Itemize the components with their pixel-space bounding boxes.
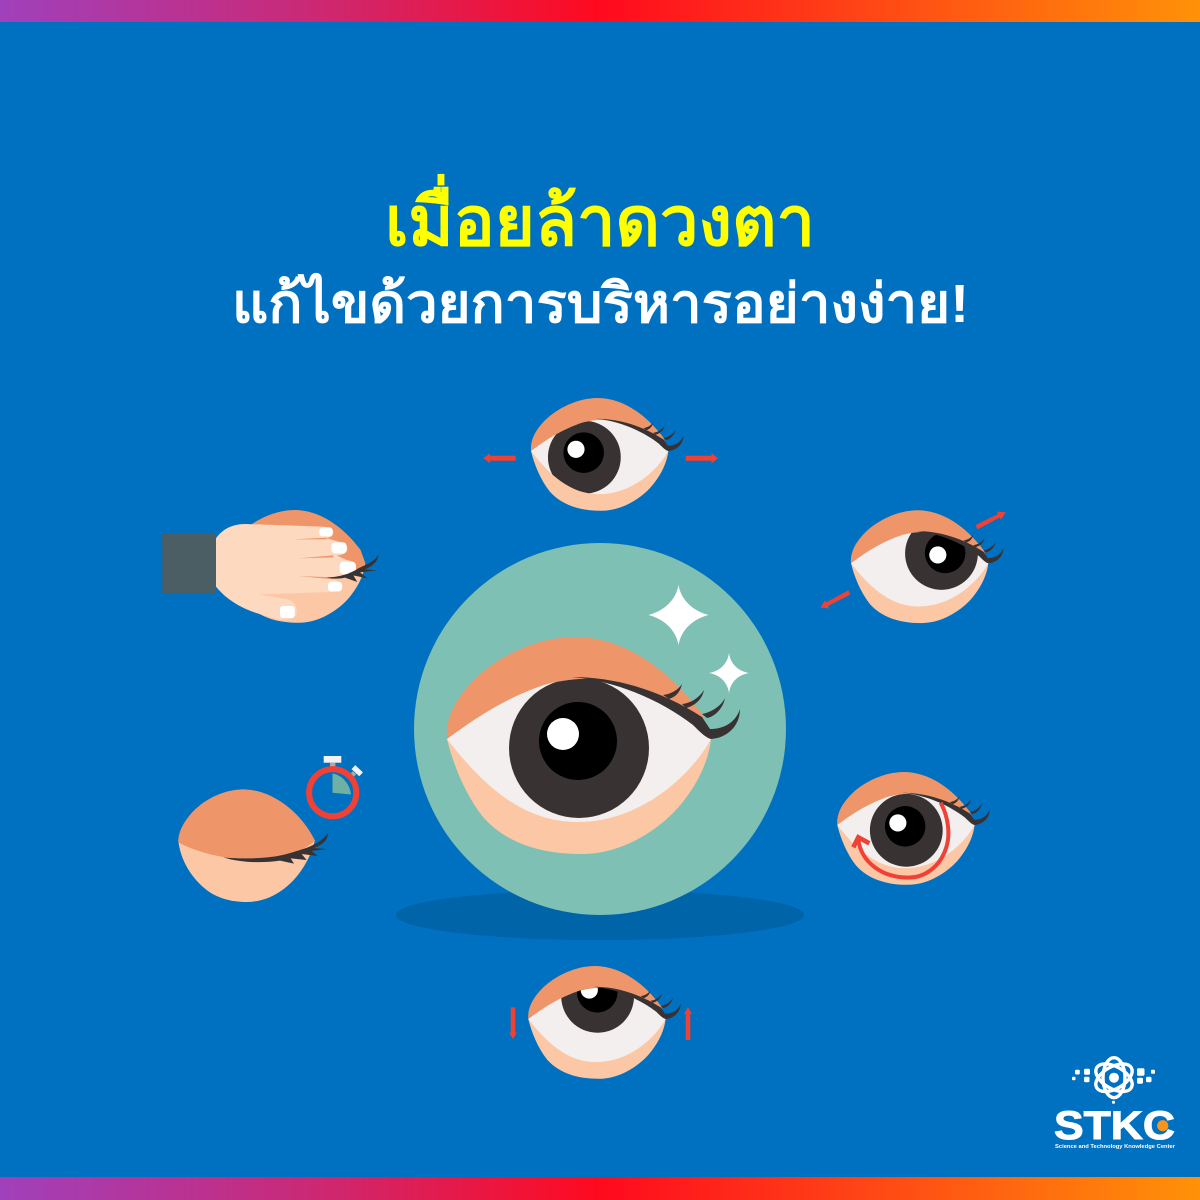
hand and sleeve — [162, 524, 379, 620]
eye shape — [837, 772, 975, 885]
eye: looking up right — [851, 510, 1003, 623]
finger gap 2 — [298, 555, 333, 558]
finger gap 3 — [298, 576, 333, 579]
eye shape — [851, 510, 988, 623]
eye shape — [528, 966, 666, 1079]
logo atom emblem — [1072, 1058, 1155, 1104]
lashes — [223, 833, 328, 864]
sparkle small — [709, 653, 749, 693]
covered eye lid fill — [228, 563, 365, 577]
eye: closed with timer — [178, 756, 363, 902]
eye shape — [531, 398, 668, 511]
logo — [1054, 1058, 1176, 1150]
iris and pupil — [561, 988, 634, 1033]
eyelashes — [596, 419, 683, 451]
arrow: down left — [820, 590, 850, 608]
stopwatch — [309, 756, 363, 816]
central teal circle — [414, 543, 786, 915]
eyelashes — [593, 987, 681, 1019]
iris and pupil — [548, 421, 621, 494]
eye: looking left — [531, 398, 683, 511]
eye body — [837, 772, 990, 885]
iris and pupil — [509, 678, 649, 818]
nail 1 — [319, 527, 333, 536]
iris and pupil — [905, 532, 978, 590]
elapsed time sector — [332, 774, 351, 794]
finger gap 1 — [293, 538, 327, 539]
upper eyelid — [228, 510, 365, 563]
heading line 1: เมื่อยล้าดวงตา — [385, 173, 815, 260]
title — [232, 173, 969, 334]
crown stem — [330, 763, 335, 767]
arrow: up — [684, 1007, 692, 1040]
eyelashes — [572, 677, 740, 739]
lashes over fingers — [327, 554, 379, 582]
eyelashes — [902, 793, 990, 825]
nail 3 — [340, 562, 356, 574]
arrow: up right — [976, 512, 1006, 529]
nail 5 — [280, 606, 295, 618]
iris and pupil — [870, 794, 943, 867]
orbit rings — [1091, 1058, 1137, 1098]
logo wordmark: STKC — [1054, 1104, 1175, 1148]
circular arrow — [853, 803, 948, 878]
heading line 2: แก้ไขด้วยการบริหารอย่างง่าย! — [232, 272, 969, 334]
eyelashes — [916, 531, 1003, 563]
nucleus — [1109, 1073, 1119, 1083]
ground shadow — [396, 890, 804, 940]
side button — [352, 765, 363, 776]
bottom gradient bar — [0, 1177, 1200, 1200]
hand — [216, 524, 356, 620]
top gradient bar — [0, 0, 1200, 22]
sparkle large — [648, 585, 708, 645]
arrow: left — [483, 453, 516, 463]
covered eye — [228, 510, 365, 623]
lower eyelid — [228, 563, 365, 623]
lower lid — [178, 840, 315, 902]
sleeve — [162, 533, 216, 593]
eye: looking up — [528, 960, 681, 1079]
logo tagline: Science and Technology Knowledge Center — [1055, 1144, 1176, 1150]
eye: covered by hand — [162, 510, 379, 623]
upper lid — [178, 789, 315, 860]
closed eye — [178, 789, 328, 902]
nail 2 — [331, 542, 347, 553]
side stem — [349, 771, 356, 778]
central eye — [447, 637, 740, 854]
eye: rolling — [837, 772, 990, 885]
watch ring — [309, 769, 356, 816]
watch crown — [324, 756, 341, 763]
nail 4 — [328, 582, 342, 591]
arrow: down — [509, 1007, 517, 1039]
eye shape — [447, 637, 711, 854]
arrow: right — [686, 453, 718, 463]
logo orange dot — [1157, 1120, 1168, 1131]
data dots — [1072, 1068, 1155, 1104]
